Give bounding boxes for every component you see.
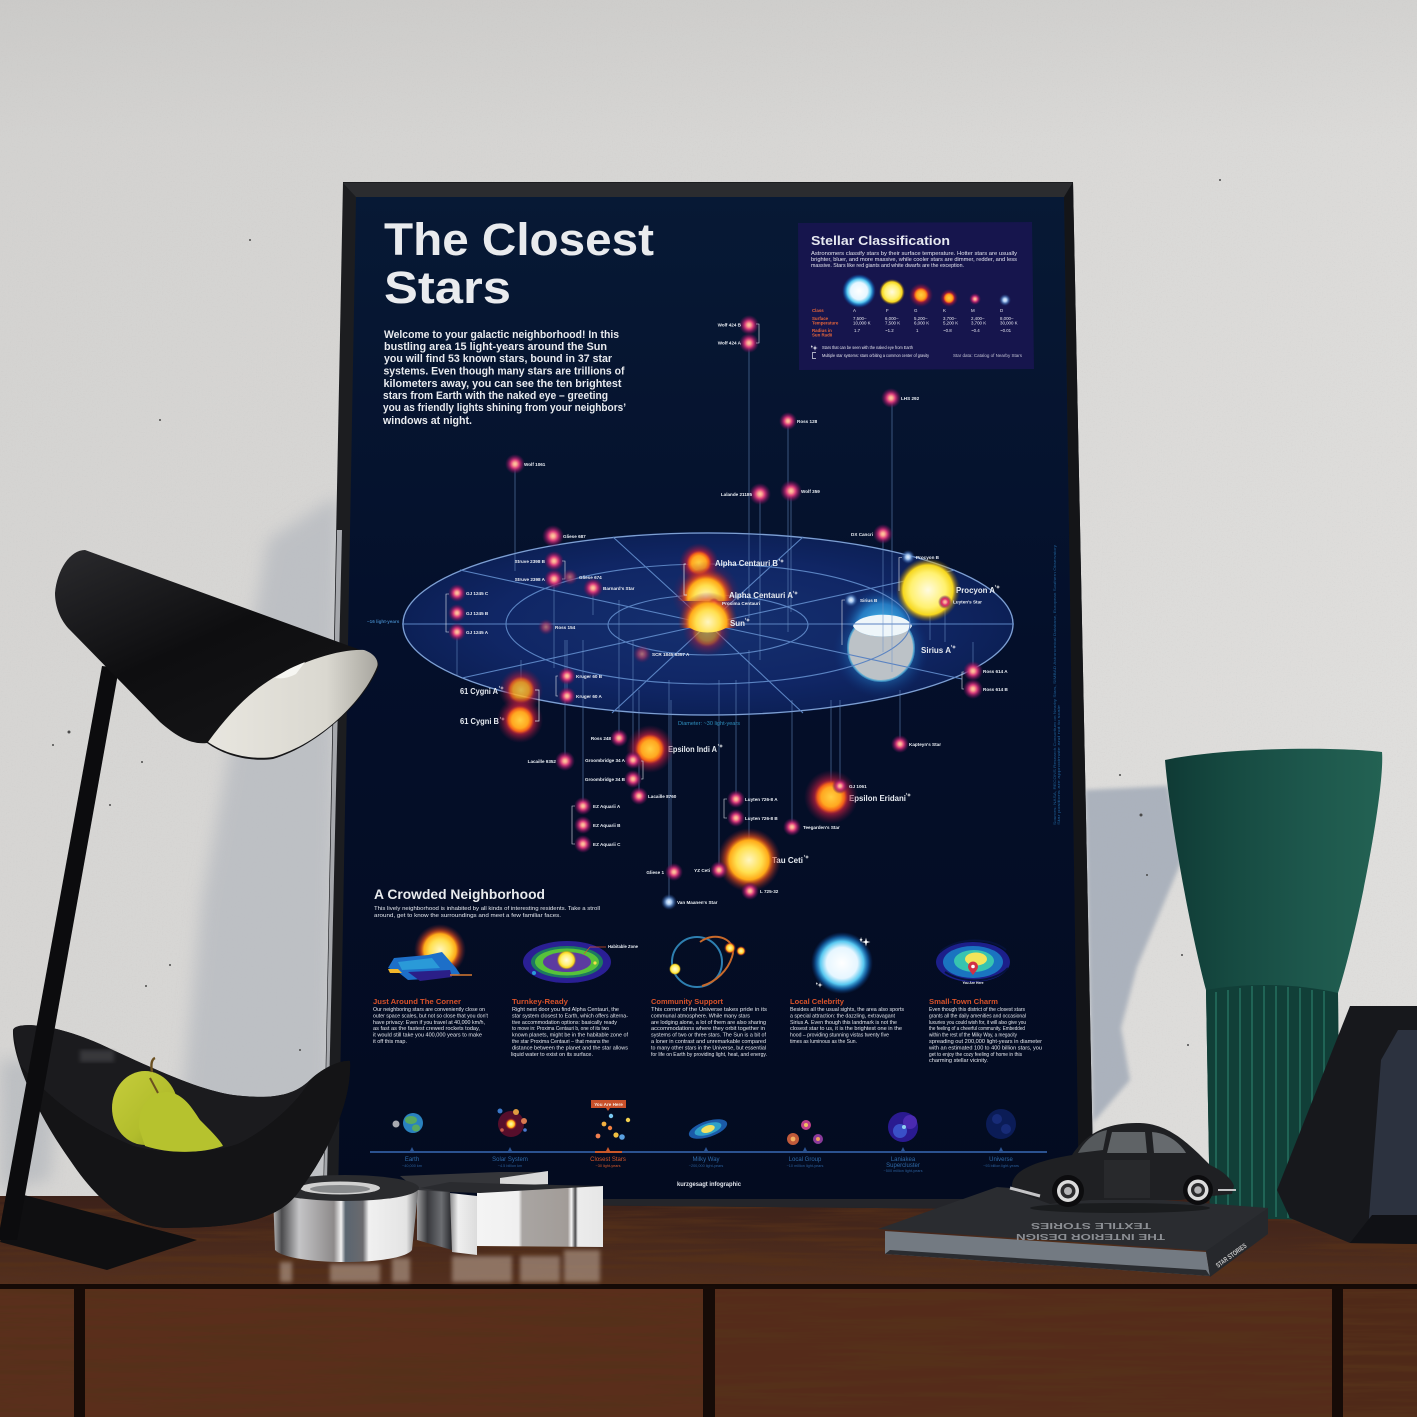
cabinet bbox=[0, 1196, 1417, 1417]
timeline label: Universe: Universe bbox=[989, 1157, 1013, 1163]
dark faceted object bbox=[1277, 1006, 1417, 1244]
star: Ross 614 B: Ross 614 B bbox=[983, 687, 1008, 692]
bowl with pears bbox=[13, 1025, 350, 1228]
card: Turnkey-Ready: liquid water to exist on its surface. bbox=[511, 1052, 593, 1058]
star: LHS 292: LHS 292 bbox=[901, 396, 920, 401]
timeline label: Earth bbox=[402, 1147, 422, 1168]
star: Lalande 21185 bbox=[721, 483, 771, 505]
star: GJ 1245 B bbox=[448, 604, 489, 622]
glow: Sun below plane bbox=[683, 608, 731, 656]
star: Lacaille 8760 bbox=[630, 787, 677, 805]
title: The Closest bbox=[384, 214, 654, 265]
timeline label: Milky Way: Milky Way bbox=[692, 1157, 720, 1163]
large star labels: Proxima Centauri bbox=[722, 601, 760, 606]
star: 61 Cygni B bbox=[497, 697, 543, 743]
card: Turnkey-Ready bbox=[511, 997, 628, 1058]
large star labels: Sirius A bbox=[921, 646, 951, 655]
star: Lalande 21185: Lalande 21185 bbox=[721, 492, 752, 497]
star: Luyten's Star bbox=[938, 595, 982, 609]
star: YZ Ceti bbox=[694, 861, 728, 879]
card: Community Support: for life on Earth by providing light, heat, and energy. bbox=[651, 1052, 767, 1058]
legend bbox=[811, 345, 1023, 358]
star: Barnard's Star bbox=[583, 578, 635, 598]
panel description bbox=[811, 251, 1017, 269]
large star labels: Epsilon Eridani bbox=[849, 794, 906, 803]
classification table: ~0.8 bbox=[943, 328, 952, 333]
star: SCR 1845-6357 A bbox=[633, 645, 690, 663]
star: L 725-32: L 725-32 bbox=[760, 889, 779, 894]
timeline label: Closest Stars: ~30 light-years bbox=[595, 1164, 621, 1168]
star: 61 Cygni A bbox=[499, 668, 543, 712]
timeline label: Laniakea Supercluster bbox=[884, 1147, 923, 1173]
star: Tau Ceti bbox=[717, 828, 781, 892]
icon: Laniakea Supercluster bbox=[888, 1112, 918, 1142]
card: Small-Town Charm: luxuries you could wish for, it will also give you bbox=[929, 1020, 1026, 1026]
card: Local Celebrity: times as luminous as the Sun. bbox=[790, 1039, 857, 1045]
icon: spaceship and star bbox=[388, 924, 472, 981]
pear back bbox=[112, 1071, 178, 1145]
star: Wolf 1061: Wolf 1061 bbox=[524, 462, 546, 467]
star: Ross 248: Ross 248 bbox=[591, 736, 611, 741]
large star labels: Alpha Centauri B bbox=[715, 559, 778, 568]
you are here tag bbox=[591, 1100, 626, 1111]
star: Procyon A bbox=[896, 558, 960, 622]
card: Community Support: This corner of the Universe takes pride in its bbox=[651, 1007, 767, 1013]
star: EZ Aquarii A: EZ Aquarii A bbox=[593, 804, 621, 809]
star: Sun bbox=[678, 592, 738, 632]
intro paragraph: you as friendly lights shining from your neighbors’ bbox=[383, 402, 626, 414]
star: Epsilon Indi A bbox=[626, 725, 674, 773]
star: Alpha Centauri B bbox=[679, 543, 719, 583]
card: Turnkey-Ready: known planets, might be in the habitable zone of bbox=[512, 1033, 628, 1039]
classification table: 7,500 K bbox=[885, 320, 900, 326]
book title mirrored: THE INTERIOR DESIGN bbox=[1016, 1232, 1165, 1241]
card: Small-Town Charm bbox=[928, 997, 1042, 1064]
intro paragraph: windows at night. bbox=[382, 415, 472, 427]
star: Luyten 726-8 B bbox=[724, 799, 778, 827]
star: Teegarden's Star: Teegarden's Star bbox=[803, 825, 840, 830]
right arm bbox=[477, 1186, 603, 1247]
card: Local Celebrity bbox=[790, 997, 904, 1045]
star: Ross 128: Ross 128 bbox=[797, 419, 818, 424]
classification table: 5,200 K bbox=[943, 320, 958, 326]
intro paragraph: kilometers away, you can see the ten brightest bbox=[384, 378, 622, 390]
star: Gliese 687 bbox=[542, 525, 586, 547]
star: GJ 1245 B: GJ 1245 B bbox=[466, 611, 489, 616]
star: Groombridge 34 A: Groombridge 34 A bbox=[585, 758, 626, 763]
timeline label: Closest Stars: Closest Stars bbox=[590, 1157, 626, 1163]
star: L 725-32 bbox=[741, 882, 779, 900]
classification table: Radius in bbox=[812, 328, 832, 333]
credit: kurzgesagt infographic: kurzgesagt infographic bbox=[677, 1182, 742, 1188]
card: Local Celebrity: closest star to us, it is the brightest one in the bbox=[790, 1026, 902, 1032]
card: Turnkey-Ready: star system closest to Earth, which offers alterna- bbox=[512, 1013, 628, 1019]
card: Local Celebrity: Sirius A. Even though this landmark is not the bbox=[790, 1020, 897, 1026]
card: Just Around The Corner: as fast as the fastest crewed rockets today, bbox=[373, 1026, 480, 1032]
legend: Stars that can be seen with the naked eye from Earth bbox=[822, 345, 913, 350]
timeline label: Earth: Earth bbox=[405, 1157, 419, 1163]
star: YZ Ceti: YZ Ceti bbox=[694, 868, 710, 873]
toy car bbox=[1010, 1123, 1236, 1213]
star: GJ 1061: GJ 1061 bbox=[849, 784, 867, 789]
lamp base bbox=[0, 1194, 197, 1270]
lamp bulb highlight bbox=[275, 662, 305, 678]
card: Just Around The Corner: it off this map. bbox=[373, 1039, 407, 1045]
large star labels: 61 Cygni B bbox=[460, 717, 499, 726]
book title mirrored: TEXTILE STORIES bbox=[1030, 1221, 1151, 1230]
star: Teegarden's Star bbox=[783, 818, 840, 836]
star: Van Maanen's Star bbox=[661, 894, 718, 910]
star: Groombridge 34 A bbox=[585, 751, 642, 769]
star: Epsilon Eridani bbox=[804, 770, 858, 824]
card: Turnkey-Ready: Right next door you find Alpha Centauri, the bbox=[512, 1007, 619, 1013]
panel description: Astronomers classify stars by their surface temperature. Hotter stars are usually bbox=[811, 251, 1017, 257]
classification table: Class bbox=[812, 308, 824, 313]
map grid lines bbox=[402, 533, 1014, 715]
card: Local Celebrity: hood – providing stunning vistas twenty five bbox=[790, 1033, 889, 1039]
vase bbox=[1165, 749, 1382, 1220]
timeline label: Earth: ~40,000 km bbox=[402, 1164, 422, 1168]
classification table: 1.7 bbox=[854, 328, 861, 333]
card: Small-Town Charm: within the rest of the Milky Way, a megacity bbox=[928, 1033, 1017, 1039]
bracket: Alpha Centauri bbox=[684, 564, 687, 595]
star: Struve 2398 A: Struve 2398 A bbox=[515, 577, 546, 582]
classification table: ~1.2 bbox=[885, 328, 894, 333]
vertical credits text: Star positions are approximate and not to scale bbox=[1057, 705, 1061, 825]
card: Turnkey-Ready: to move in: Proxima Centauri b, one of its two bbox=[512, 1026, 609, 1032]
star: Kapteyn's Star bbox=[891, 735, 941, 753]
star: GJ 1245 C bbox=[448, 584, 489, 602]
star: Wolf 424 A bbox=[718, 324, 759, 353]
card: Community Support: systems of two or three stars. The Sun is a bit of bbox=[651, 1033, 766, 1039]
star: Lacaille 9352 bbox=[528, 751, 575, 771]
card: Small-Town Charm: Even though this district of the closest stars bbox=[929, 1007, 1025, 1013]
chrome reflections on the wood bbox=[280, 1250, 600, 1282]
timeline label: Universe bbox=[983, 1147, 1019, 1168]
icon: habitable zone: Habitable Zone bbox=[608, 944, 639, 949]
star: Gliese 1 bbox=[646, 863, 683, 881]
vertical credits text: Sources: NASA, RECONS Research Consortium on Nearby Stars, SIMBAD Astronomical Database, European Southern Observatory bbox=[1053, 545, 1057, 825]
star: Procyon B bbox=[899, 550, 940, 591]
card: Just Around The Corner: have privacy: Even if you travel at 40,000 km/h, bbox=[373, 1020, 485, 1026]
legend: Multiple star systems: stars orbiting a common center of gravity bbox=[822, 353, 930, 358]
star: Kruger 60 B: Kruger 60 B bbox=[576, 674, 603, 679]
lamp bbox=[0, 550, 378, 1270]
card: Small-Town Charm: the feeling of a cheerful community. Embedded bbox=[929, 1026, 1025, 1032]
timeline label: Local Group: Local Group bbox=[789, 1157, 822, 1163]
title line two: Stars bbox=[384, 262, 511, 313]
star: Gliese 674 bbox=[562, 569, 602, 585]
star: Luyten 726-8 B: Luyten 726-8 B bbox=[745, 816, 778, 821]
timeline label: Universe: ~93 billion light-years bbox=[983, 1164, 1019, 1168]
classification table: 6,000– bbox=[885, 316, 899, 321]
star: Ross 614 A bbox=[963, 661, 1008, 681]
star: Ross 154: Ross 154 bbox=[555, 625, 576, 630]
classification table: 30,000 K bbox=[1000, 320, 1018, 326]
cabinet top surface bbox=[0, 1196, 1417, 1286]
intro paragraph: stars from Earth with the naked eye – greeting bbox=[383, 390, 608, 402]
icon: closest stars cluster bbox=[596, 1114, 630, 1140]
star: Luyten 726-8 A: Luyten 726-8 A bbox=[745, 797, 778, 802]
classification table: 3,700 K bbox=[971, 320, 986, 326]
classification table: M bbox=[971, 308, 975, 313]
panel: stellar classification bbox=[798, 222, 1034, 370]
star: Wolf 424 A: Wolf 424 A bbox=[718, 340, 742, 346]
classification table: Surface bbox=[812, 316, 829, 321]
card: Local Celebrity: Local Celebrity bbox=[790, 997, 845, 1006]
top plane bbox=[420, 1182, 603, 1193]
classification table: 8,000– bbox=[1000, 316, 1014, 321]
panel description: brighter, bluer, and more massive, while cooler stars are dimmer, redder, and less bbox=[811, 257, 1017, 263]
star: GJ 1061 bbox=[832, 778, 867, 794]
star: SCR 1845-6357 A: SCR 1845-6357 A bbox=[652, 652, 690, 657]
bowl front lip bbox=[20, 1061, 350, 1228]
icon: solar system bbox=[498, 1108, 527, 1137]
timeline label: Milky Way: ~200,000 light-years bbox=[689, 1164, 723, 1168]
scale label: radius: ~16 light-years bbox=[367, 619, 400, 624]
vertical credits text bbox=[1053, 545, 1061, 825]
icon: Earth and Moon bbox=[392, 1113, 423, 1133]
wall speckles bbox=[52, 179, 1221, 1051]
classification table: A bbox=[853, 308, 856, 313]
star: Kruger 60 A: Kruger 60 A bbox=[576, 694, 603, 699]
bracket: 61 Cygni bbox=[535, 690, 539, 721]
book title mirrored bbox=[1016, 1221, 1165, 1241]
card: Turnkey-Ready: Turnkey-Ready bbox=[512, 997, 569, 1006]
classification table: 1 bbox=[916, 328, 919, 333]
timeline label: Milky Way bbox=[689, 1147, 723, 1168]
card: Community Support bbox=[651, 997, 767, 1058]
classification table: G bbox=[914, 308, 918, 313]
classification table: 7,500– bbox=[853, 316, 867, 321]
star: Lacaille 8760: Lacaille 8760 bbox=[648, 794, 677, 799]
card: Small-Town Charm: with an estimated 100 to 400 billion stars, you bbox=[928, 1045, 1042, 1051]
card: Just Around The Corner: Our neighboring stars are conveniently close on bbox=[373, 1007, 485, 1013]
star: Gliese 674: Gliese 674 bbox=[579, 575, 602, 580]
card: Just Around The Corner bbox=[373, 997, 488, 1045]
classification table: Sun Radii bbox=[812, 332, 832, 338]
star: EZ Aquarii C: EZ Aquarii C bbox=[593, 842, 621, 847]
intro paragraph bbox=[382, 329, 626, 427]
intro paragraph: bustling area 15 light-years around the Sun bbox=[384, 341, 607, 353]
star group: Alpha Centauri and Sun bbox=[672, 543, 740, 656]
star: Groombridge 34 B: Groombridge 34 B bbox=[585, 777, 626, 782]
star: GJ 1245 C: GJ 1245 C bbox=[466, 591, 489, 596]
pear stem bbox=[151, 1058, 155, 1072]
star: GJ 1245 A bbox=[446, 594, 489, 641]
icon: habitable zone bbox=[523, 941, 639, 983]
panel description: massive. Stars like red giants and white dwarfs are the exception. bbox=[811, 263, 964, 269]
star: Alpha Centauri A bbox=[678, 569, 734, 601]
intro paragraph: you will find 53 known stars, bound in 37 star bbox=[384, 353, 613, 365]
front block bbox=[450, 1193, 477, 1255]
classification table: 5,200– bbox=[914, 316, 928, 321]
scale timeline bbox=[370, 1147, 1047, 1173]
card: Just Around The Corner: Just Around The Corner bbox=[373, 997, 461, 1006]
star: Procyon B: Procyon B bbox=[916, 555, 940, 560]
star: EZ Aquarii C bbox=[572, 806, 621, 853]
star: EZ Aquarii B: EZ Aquarii B bbox=[593, 823, 621, 828]
card: Community Support: are lodging alone, a lot of them are also sharing bbox=[651, 1020, 766, 1026]
star: DX Cancri bbox=[851, 524, 893, 544]
pear front bbox=[139, 1092, 223, 1152]
star: Groombridge 34 B bbox=[585, 761, 643, 788]
card: Small-Town Charm: charming stellar vicinity. bbox=[929, 1058, 988, 1064]
intro paragraph: systems. Even though many stars are trillions of bbox=[384, 366, 625, 378]
star: Van Maanen's Star: Van Maanen's Star bbox=[677, 900, 718, 905]
large star labels: Sun bbox=[730, 619, 745, 628]
large star labels bbox=[460, 559, 1000, 865]
drawer fronts bbox=[0, 1286, 1417, 1417]
back arm bbox=[400, 1172, 548, 1192]
large star labels: Alpha Centauri A bbox=[729, 591, 793, 600]
card: Turnkey-Ready: tive accommodation options: basically ready bbox=[512, 1020, 617, 1026]
card: Community Support: a loner in contrast and unremarkable compared bbox=[651, 1039, 766, 1045]
star: Kruger 60 A bbox=[556, 676, 603, 705]
star: Struve 2398 A bbox=[515, 561, 565, 589]
star: Ross 614 B bbox=[962, 672, 1008, 699]
glow: Alpha Centauri A bbox=[672, 561, 740, 629]
card: Local Celebrity: a special attraction: the dazzling, extravagant bbox=[790, 1013, 895, 1019]
timeline label: Laniakea Supercluster: ~500 million light-years bbox=[884, 1169, 923, 1173]
panel heading: Stellar Classification bbox=[811, 233, 950, 248]
card: Turnkey-Ready: the star Proxima Centauri – that means the bbox=[512, 1039, 609, 1045]
icon: binary orbits bbox=[669, 937, 746, 987]
star: Ross 614 A: Ross 614 A bbox=[983, 669, 1008, 674]
star: Luyten 726-8 A bbox=[727, 790, 778, 808]
large star labels: Tau Ceti bbox=[772, 856, 803, 865]
timeline label: Closest Stars bbox=[590, 1147, 626, 1168]
card: Small-Town Charm: Small-Town Charm bbox=[929, 997, 998, 1006]
icon: Milky Way galaxy with pin bbox=[936, 940, 1010, 985]
icon: Milky Way galaxy with pin: You Are Here bbox=[962, 981, 984, 985]
star: Ross 128 bbox=[779, 412, 818, 430]
classification table: ~0.01 bbox=[1000, 328, 1012, 333]
star: Wolf 1061 bbox=[505, 454, 546, 474]
card: Local Celebrity: Besides all the usual sights, the area also sports bbox=[790, 1007, 904, 1013]
card: Small-Town Charm: get to enjoy the cozy feeling of home in this bbox=[929, 1052, 1022, 1058]
icon: Milky Way bbox=[687, 1115, 729, 1143]
large star labels: Epsilon Indi A bbox=[668, 745, 717, 754]
star: Wolf 424 B: Wolf 424 B bbox=[718, 322, 742, 328]
star: Kruger 60 B bbox=[558, 667, 603, 685]
classification table bbox=[812, 308, 1018, 338]
star: GJ 1245 A: GJ 1245 A bbox=[466, 630, 489, 635]
card: Community Support: communal atmosphere. While many stars bbox=[651, 1013, 750, 1019]
large star labels: Procyon A bbox=[956, 586, 995, 595]
star: Struve 2398 B bbox=[515, 551, 564, 571]
timeline label: Laniakea Supercluster: Supercluster bbox=[886, 1163, 920, 1169]
card: Small-Town Charm: spreading out 200,000 light-years in diameter bbox=[929, 1039, 1042, 1045]
card: Just Around The Corner: it would still take you 400,000 years to make bbox=[373, 1033, 482, 1039]
star: Sirius B: Sirius B bbox=[860, 598, 878, 603]
classification table: K bbox=[943, 308, 946, 313]
classification table: F bbox=[886, 308, 889, 313]
card: Community Support: accommodations where they orbit together in bbox=[651, 1026, 765, 1032]
timeline label: Local Group: ~10 million light-years bbox=[787, 1164, 824, 1168]
icon: Sirius star bbox=[811, 932, 873, 994]
star: EZ Aquarii A bbox=[574, 797, 621, 815]
lamp pole bbox=[0, 666, 119, 1240]
classification table: ~0.4 bbox=[971, 328, 980, 333]
classification stars bbox=[842, 274, 1011, 308]
star: Wolf 359: Wolf 359 bbox=[801, 489, 820, 494]
star: Struve 2398 B: Struve 2398 B bbox=[515, 559, 546, 564]
intro paragraph: Welcome to your galactic neighborhood! In this bbox=[384, 329, 619, 341]
section heading: A Crowded Neighborhood: A Crowded Neighborhood bbox=[374, 887, 545, 902]
star: Sirius A bbox=[839, 592, 924, 693]
star: Proxima Centauri bbox=[708, 598, 720, 610]
classification table: Temperature bbox=[812, 320, 839, 326]
section intro text bbox=[374, 906, 600, 919]
star: Wolf 359 bbox=[780, 480, 820, 502]
section intro text: around, get to know the surroundings and meet a few familiar faces. bbox=[374, 913, 561, 919]
timeline label: Solar System bbox=[492, 1147, 528, 1168]
star: LHS 292 bbox=[881, 388, 920, 408]
section intro text: This lively neighborhood is inhabited by all kinds of interesting residents. Take a stroll bbox=[374, 906, 600, 912]
book bbox=[878, 1187, 1268, 1277]
chrome ring bbox=[271, 1175, 419, 1262]
scale label: diameter: Diameter: ~30 light-years bbox=[678, 721, 740, 727]
icon: Local Group bbox=[787, 1120, 823, 1145]
star: Ross 248 bbox=[591, 729, 628, 747]
legend: Star data: Catalog of Nearby Stars bbox=[953, 353, 1023, 358]
star: Wolf 424 B bbox=[718, 315, 759, 335]
card: Small-Town Charm: grants all the daily amenities and occasional bbox=[929, 1013, 1026, 1019]
star: Gliese 1: Gliese 1 bbox=[646, 870, 664, 875]
star: Luyten's Star: Luyten's Star bbox=[953, 600, 982, 604]
classification table: 3,700– bbox=[943, 316, 957, 321]
lamp shade bbox=[55, 550, 378, 760]
timeline label: Solar System: Solar System bbox=[492, 1157, 528, 1163]
star: Sirius B bbox=[842, 593, 878, 645]
chrome star object bbox=[271, 1171, 603, 1282]
classification table: 6,000 K bbox=[914, 320, 929, 326]
card: Turnkey-Ready: distance between the planet and the star allows bbox=[512, 1045, 628, 1051]
star: Gliese 687: Gliese 687 bbox=[563, 534, 586, 539]
you are here tag: You Are Here bbox=[594, 1102, 623, 1107]
star: Kapteyn's Star: Kapteyn's Star bbox=[909, 742, 941, 747]
star map disk bbox=[402, 532, 1014, 716]
card: Community Support: Community Support bbox=[651, 997, 723, 1006]
large star labels: 61 Cygni A bbox=[460, 687, 498, 696]
card: Just Around The Corner: outer space scales, but not so close that you don't bbox=[373, 1013, 488, 1019]
drop lines connecting stars to the plane bbox=[457, 343, 973, 902]
star: Ross 154 bbox=[538, 619, 576, 635]
timeline label: Local Group bbox=[787, 1147, 824, 1168]
star: Lacaille 9352: Lacaille 9352 bbox=[528, 759, 556, 764]
star: DX Cancri: DX Cancri bbox=[851, 532, 873, 537]
timeline label: Laniakea Supercluster: Laniakea bbox=[891, 1157, 916, 1163]
card: Community Support: to many other stars in the Universe, but essential bbox=[651, 1045, 766, 1051]
star: EZ Aquarii B bbox=[574, 816, 621, 834]
book spine title: STAR STORIES bbox=[1215, 1243, 1248, 1270]
poster frame bbox=[323, 182, 1094, 1210]
classification table: 10,000 K bbox=[853, 320, 871, 326]
poster: The Closest Stars bbox=[338, 197, 1079, 1199]
icon: Universe bbox=[986, 1109, 1016, 1139]
timeline label: Solar System: ~4.5 billion km bbox=[498, 1164, 522, 1168]
classification table: 2,400– bbox=[971, 316, 985, 321]
star: Barnard's Star: Barnard's Star bbox=[603, 586, 635, 591]
dark chrome facet bbox=[417, 1190, 452, 1250]
wheels bbox=[1052, 1175, 1213, 1207]
lamp shade interior bbox=[208, 650, 378, 758]
classification table: D bbox=[1000, 308, 1003, 313]
